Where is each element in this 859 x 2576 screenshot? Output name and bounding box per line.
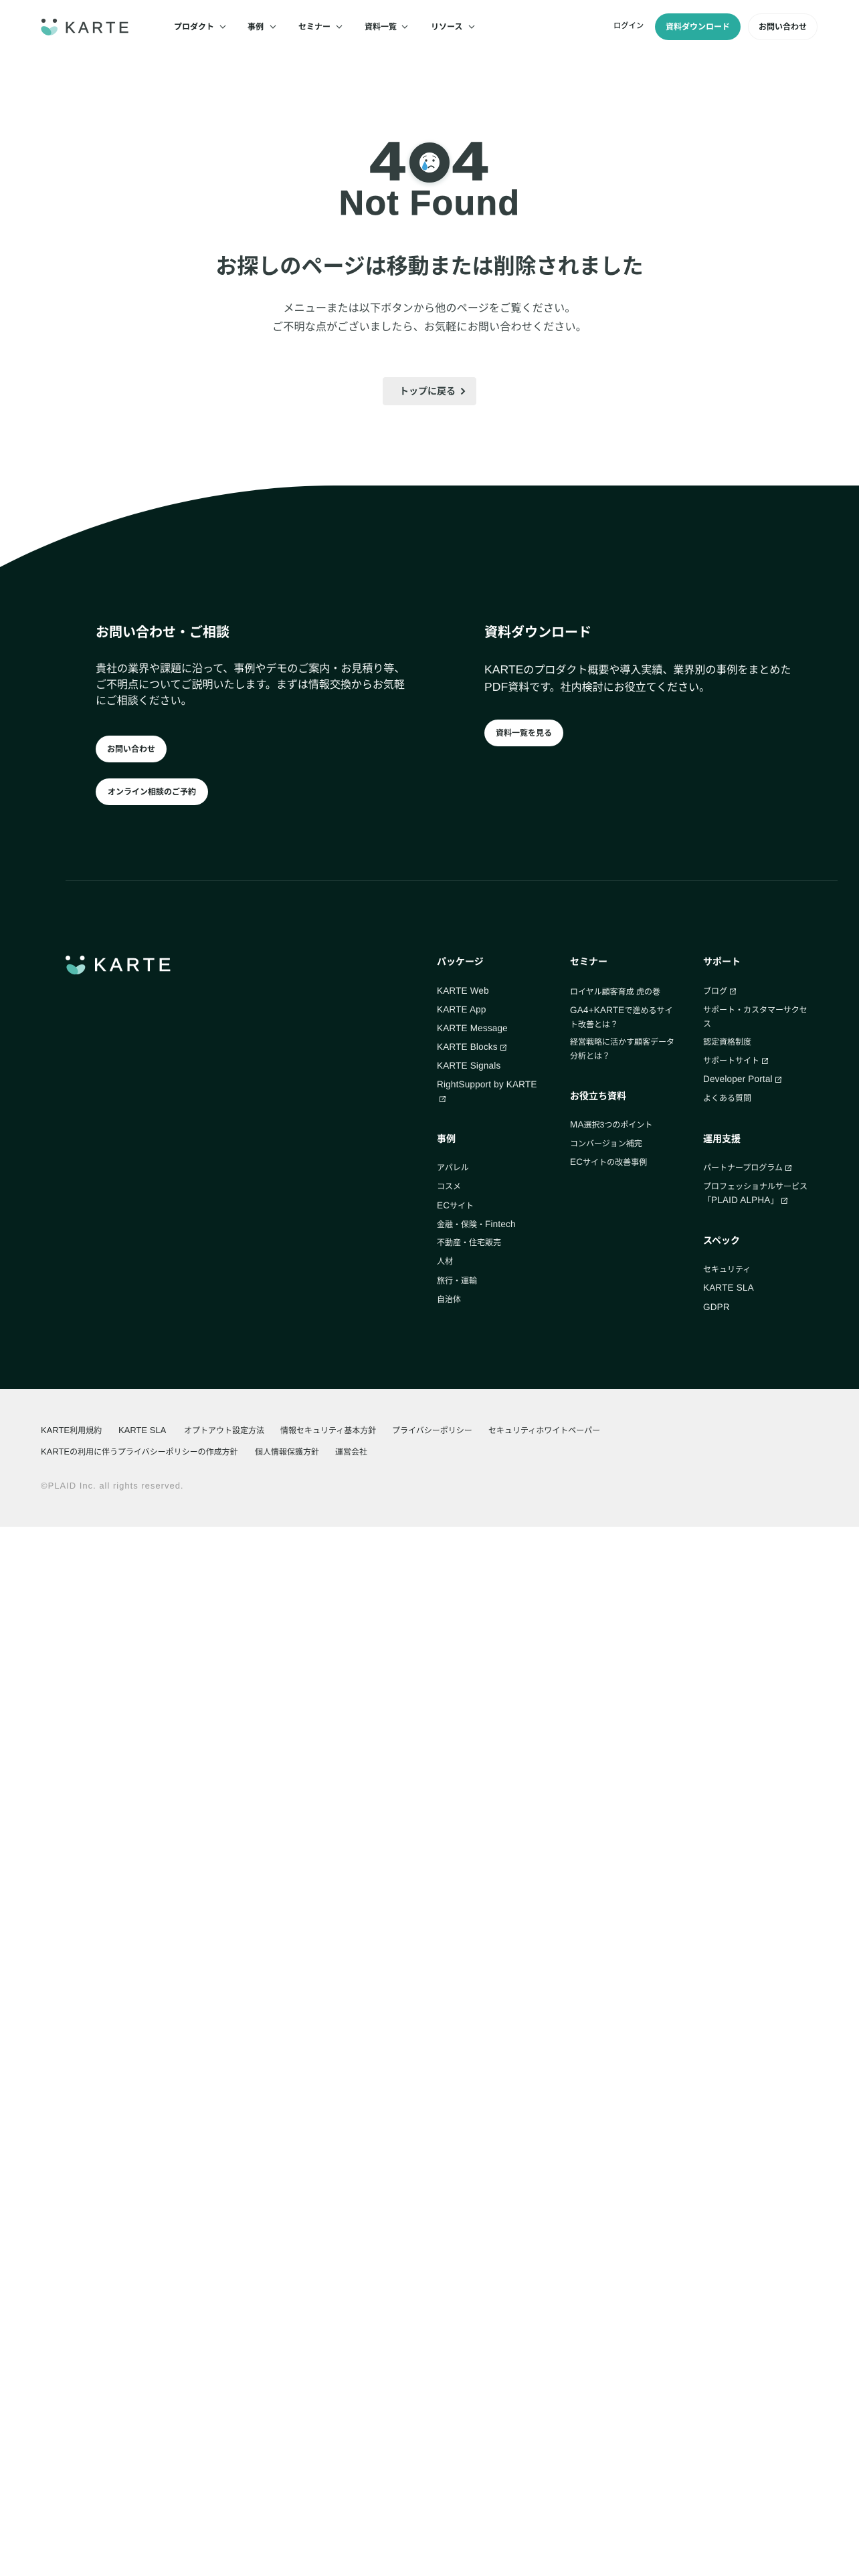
footer column: support and specs: サポート・カスタマーサクセ bbox=[703, 1005, 807, 1014]
graphic: 404 with crying face bbox=[370, 131, 488, 192]
footer column: packages and cases: 人材 bbox=[437, 1257, 453, 1266]
footer column: packages and cases: 旅行・運輸 bbox=[437, 1276, 477, 1285]
text: downloads description: KARTEのプロダクト概要や導入実績、業界別の事例をまとめた bbox=[484, 663, 791, 676]
button: contact bbox=[748, 13, 818, 40]
footer column: packages and cases: 事例 bbox=[437, 1134, 456, 1144]
legal links: KARTEの利用に伴うプライバシーポリシーの作成方針 bbox=[41, 1446, 238, 1457]
footer column: support and specs: 運用支援 bbox=[703, 1134, 741, 1144]
footer column: packages and cases: ECサイト bbox=[437, 1200, 474, 1210]
logo: KARTE footer: KARTE bbox=[94, 954, 175, 975]
copyright: ©PLAID Inc. all rights reserved. bbox=[41, 1481, 184, 1491]
legal links: 情報セキュリティ基本方針 bbox=[280, 1426, 376, 1435]
logo: KARTE: KARTE bbox=[65, 19, 132, 36]
footer column: support and specs: よくある質問 bbox=[703, 1093, 751, 1103]
button: download bbox=[655, 13, 741, 40]
text: contact description: ご不明点についてご説明いたします。まずは情報交換からお気軽 bbox=[96, 679, 405, 691]
footer column: seminars and resources: お役立ち資料 bbox=[570, 1091, 626, 1101]
graphic: 404 with crying face: 4 bbox=[452, 131, 488, 192]
main navigation: プロダクト bbox=[174, 22, 214, 31]
text: guidance message: メニューまたは以下ボタンから他のページをご覧ください。 bbox=[283, 303, 576, 314]
footer column: packages and cases: KARTE Web bbox=[437, 986, 489, 996]
legal links: 運営会社 bbox=[335, 1447, 367, 1457]
footer column: support and specs: パートナープログラム bbox=[703, 1163, 783, 1172]
legal links: プライバシーポリシー bbox=[392, 1426, 472, 1435]
footer column: seminars and resources: ト改善とは？ bbox=[570, 1019, 618, 1029]
heading: contact: お問い合わせ・ご相談 bbox=[96, 625, 229, 640]
footer column: seminars and resources: 経営戦略に活かす顧客データ bbox=[570, 1037, 674, 1047]
footer column: packages and cases: RightSupport by KARTE bbox=[437, 1079, 537, 1089]
footer column: packages and cases: KARTE Signals bbox=[437, 1061, 500, 1071]
legal links: セキュリティホワイトペーパー bbox=[488, 1426, 600, 1435]
button: download: 資料ダウンロード bbox=[666, 22, 730, 31]
footer column: support and specs: ス bbox=[703, 1019, 711, 1029]
button: back to top: トップに戻る bbox=[399, 386, 456, 397]
footer column: seminars and resources: GA4+KARTEで進めるサイ bbox=[570, 1005, 672, 1015]
button: contact: お問い合わせ bbox=[759, 22, 807, 31]
footer column: packages and cases bbox=[437, 956, 537, 1304]
button: online consultation bbox=[96, 778, 208, 805]
footer column: seminars and resources: ロイヤル顧客育成 虎の巻 bbox=[570, 987, 660, 996]
footer column: packages and cases: パッケージ bbox=[437, 956, 484, 967]
button: view documents bbox=[484, 720, 563, 746]
footer column: support and specs: プロフェッショナルサービス bbox=[703, 1182, 807, 1191]
footer column: support and specs: KARTE SLA bbox=[703, 1283, 754, 1293]
footer column: support and specs: Developer Portal bbox=[703, 1074, 773, 1084]
footer column: support and specs: サポートサイト bbox=[703, 1056, 759, 1065]
footer column: packages and cases: KARTE Message bbox=[437, 1023, 508, 1033]
main navigation: セミナー bbox=[298, 22, 330, 31]
graphic: 404 with crying face: 4 bbox=[370, 131, 405, 192]
footer column: seminars and resources: ECサイトの改善事例 bbox=[570, 1157, 647, 1167]
footer column: support and specs: セキュリティ bbox=[703, 1265, 751, 1274]
text: downloads description: PDF資料です。社内検討にお役立てください。 bbox=[484, 680, 710, 693]
text: downloads description bbox=[484, 663, 791, 693]
text: contact description bbox=[96, 663, 405, 707]
footer column: support and specs: スペック bbox=[703, 1235, 740, 1246]
footer column: support and specs: 「PLAID ALPHA」 bbox=[703, 1194, 779, 1205]
heading: Not Found: Not Found bbox=[339, 184, 520, 223]
legal links: KARTE SLA bbox=[118, 1425, 166, 1435]
button: back to top bbox=[383, 377, 476, 405]
main navigation: リソース bbox=[431, 22, 462, 31]
text: guidance message: ご不明な点がございましたら、お気軽にお問い合わせください。 bbox=[272, 321, 587, 333]
button: contact: お問い合わせ bbox=[107, 744, 155, 754]
text: contact description: 貴社の業界や課題に沿って、事例やデモのご案内・お見積り等、 bbox=[96, 663, 405, 675]
footer column: support and specs: ブログ bbox=[703, 986, 727, 996]
panel: downloads bbox=[484, 625, 791, 746]
panel: dark footer background with curve bbox=[0, 486, 859, 1389]
footer column: packages and cases: KARTE Blocks bbox=[437, 1042, 498, 1052]
button: view documents: 資料一覧を見る bbox=[496, 728, 552, 738]
legal links bbox=[41, 1425, 600, 1457]
footer column: packages and cases: コスメ bbox=[437, 1182, 461, 1191]
footer column: support and specs: 認定資格制度 bbox=[703, 1037, 751, 1047]
login link: ログイン bbox=[613, 22, 644, 30]
footer column: support and specs: サポート bbox=[703, 956, 741, 967]
footer column: seminars and resources: コンバージョン補完 bbox=[570, 1139, 642, 1148]
main navigation bbox=[174, 22, 475, 31]
main navigation: 事例 bbox=[248, 22, 264, 31]
footer column: packages and cases: 不動産・住宅販売 bbox=[437, 1238, 501, 1247]
button: contact bbox=[96, 736, 167, 762]
legal links: KARTE利用規約 bbox=[41, 1425, 102, 1435]
footer column: seminars and resources bbox=[570, 956, 674, 1167]
heading: downloads: 資料ダウンロード bbox=[484, 625, 591, 640]
legal links: オプトアウト設定方法 bbox=[184, 1426, 264, 1435]
footer column: support and specs: GDPR bbox=[703, 1302, 730, 1312]
panel: contact bbox=[96, 625, 405, 805]
footer column: seminars and resources: MA選択3つのポイント bbox=[570, 1119, 652, 1130]
main navigation: 資料一覧 bbox=[365, 22, 397, 31]
legal links: 個人情報保護方針 bbox=[255, 1447, 319, 1457]
footer column: packages and cases: KARTE App bbox=[437, 1004, 486, 1014]
footer column: seminars and resources: 分析とは？ bbox=[570, 1051, 610, 1061]
footer column: packages and cases: アパレル bbox=[437, 1163, 469, 1172]
text: contact description: にご相談ください。 bbox=[96, 695, 192, 707]
panel: legal footer bbox=[0, 1389, 859, 1527]
footer column: seminars and resources: セミナー bbox=[570, 956, 607, 967]
heading: page moved or removed: お探しのページは移動または削除されました bbox=[215, 254, 644, 278]
footer column: support and specs bbox=[703, 956, 807, 1312]
icon: chevron bbox=[460, 388, 466, 395]
button: online consultation: オンライン相談のご予約 bbox=[108, 787, 196, 796]
text: guidance message bbox=[272, 302, 587, 333]
footer column: packages and cases: 金融・保険・Fintech bbox=[437, 1219, 516, 1229]
page header bbox=[41, 13, 818, 40]
footer column: packages and cases: 自治体 bbox=[437, 1295, 461, 1304]
